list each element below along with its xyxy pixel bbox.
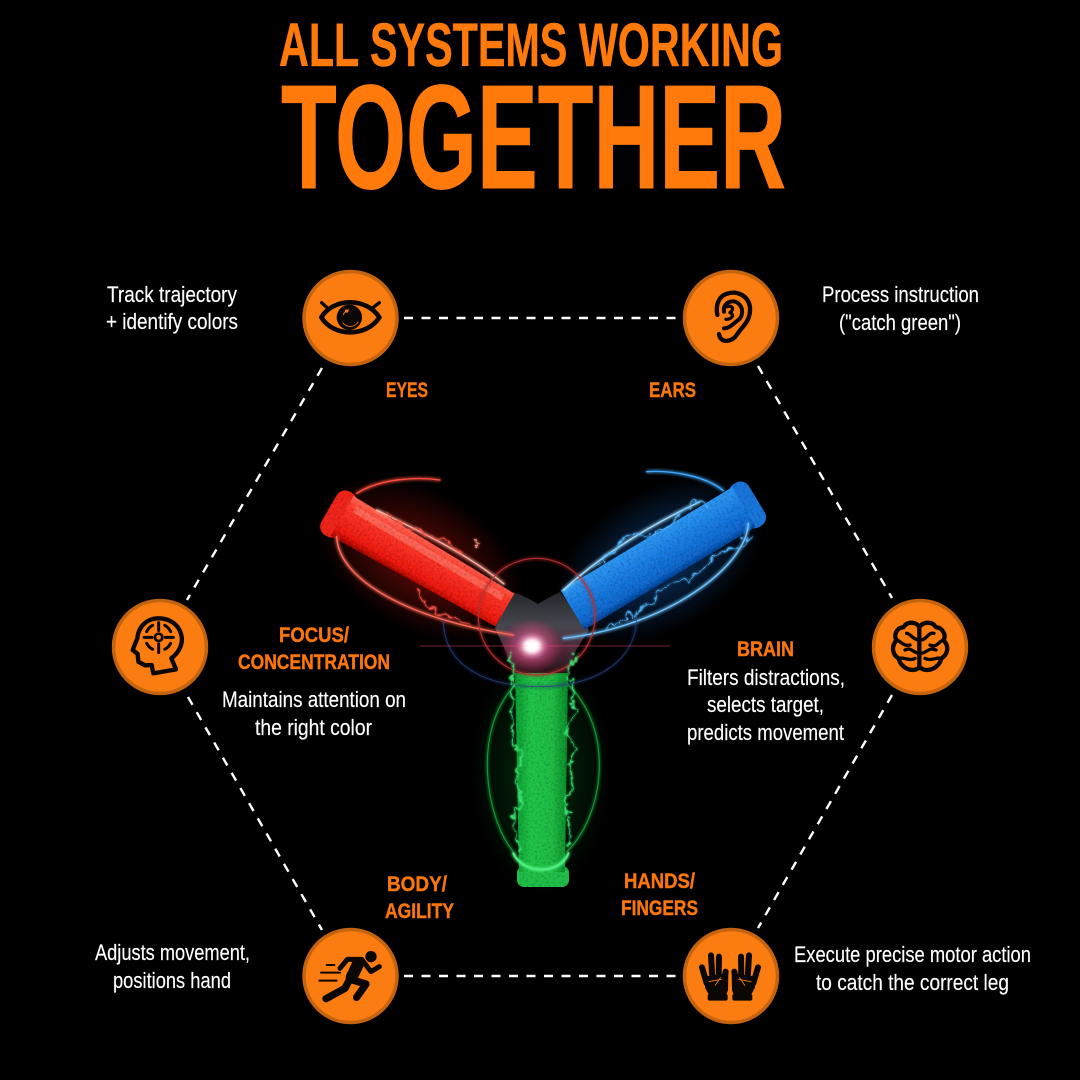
focus label: CONCENTRATION [238, 651, 390, 674]
eyes description: Track trajectory [107, 282, 237, 307]
brain description [687, 665, 845, 745]
brain description: selects target, [707, 692, 824, 717]
node: body [95, 873, 454, 1022]
icon: eye [321, 302, 379, 332]
focus description [222, 687, 406, 740]
body description: Adjusts movement, [95, 940, 250, 965]
ears badge [684, 272, 778, 364]
hands badge [684, 930, 778, 1022]
node: hands [621, 870, 1031, 1022]
ears label: EARS [649, 379, 696, 402]
focus description: the right color [255, 715, 372, 740]
body label: AGILITY [385, 900, 454, 923]
hub [495, 592, 589, 676]
icon: brain [893, 623, 947, 670]
node: focus [114, 600, 406, 740]
lens flare [420, 618, 670, 674]
focus label [238, 624, 390, 674]
hands label: HANDS/ [624, 870, 695, 893]
red leg [317, 487, 517, 632]
icon: runner [319, 951, 379, 999]
icon: head with target [133, 618, 182, 673]
title [279, 11, 786, 220]
blue leg [560, 478, 770, 631]
node: ears [649, 272, 979, 402]
brain description: Filters distractions, [687, 665, 845, 690]
brain badge [874, 600, 966, 694]
focus badge [114, 600, 206, 694]
title: ALL SYSTEMS WORKING [279, 11, 783, 79]
ears description: Process instruction [822, 282, 979, 307]
eyes description: + identify colors [106, 309, 238, 334]
icon: hands [702, 955, 758, 1001]
brain description: predicts movement [687, 720, 844, 745]
body label [385, 873, 454, 923]
ears description [822, 282, 979, 335]
eyes description [106, 282, 238, 334]
focus label: FOCUS/ [279, 624, 349, 647]
hands description: to catch the correct leg [816, 970, 1009, 995]
ears description: ("catch green") [839, 310, 961, 335]
body badge [304, 930, 397, 1022]
brain label: BRAIN [737, 638, 794, 661]
node: eyes [106, 272, 428, 402]
body description [95, 940, 250, 993]
hands label [621, 870, 698, 920]
green leg [515, 673, 569, 887]
eyes label: EYES [386, 379, 428, 402]
central three-legged product with energy glow [285, 441, 795, 895]
energy arcs and lightning [337, 471, 748, 870]
focus description: Maintains attention on [222, 687, 406, 712]
title: TOGETHER [281, 55, 786, 220]
node: brain [687, 600, 966, 745]
body description: positions hand [113, 968, 231, 993]
body label: BODY/ [387, 873, 447, 896]
hands label: FINGERS [621, 897, 698, 920]
eyes badge [304, 272, 397, 364]
hands description: Execute precise motor action [794, 942, 1031, 967]
hands description [794, 942, 1031, 995]
dashed hexagon connectors [187, 318, 892, 976]
icon: ear [717, 293, 750, 341]
